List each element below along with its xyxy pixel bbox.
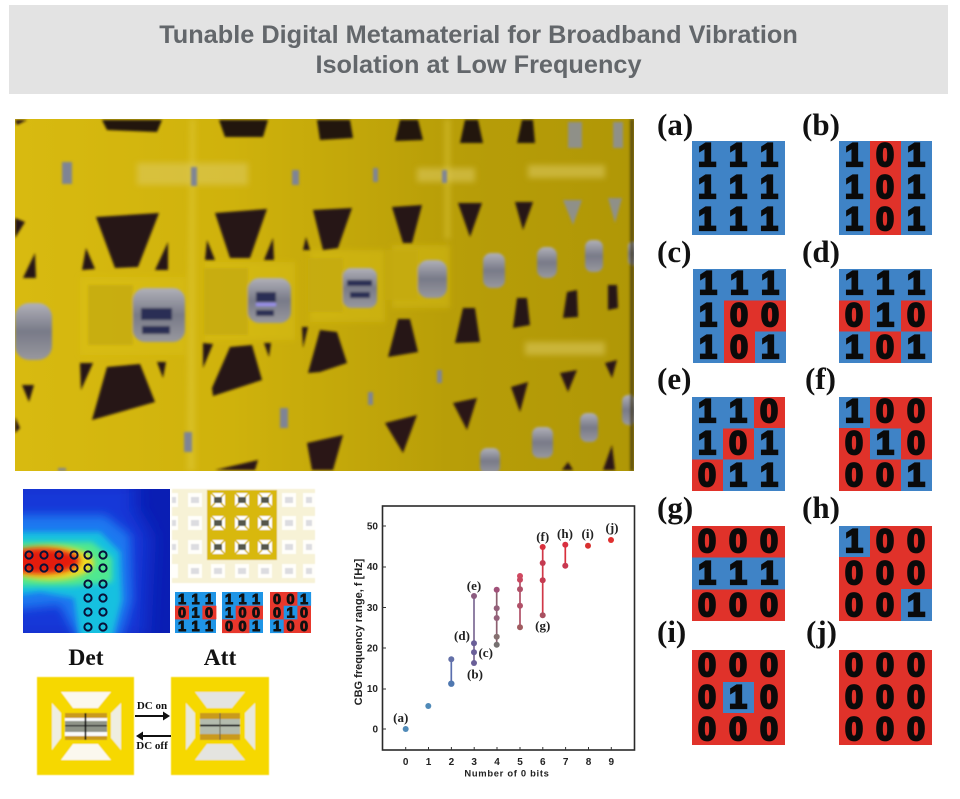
pattern (i): 010 [698,679,778,715]
pattern (a): 111 [698,201,778,237]
scatter chart: CBG frequency range vs number of 0 bits: (a) [393,710,408,725]
small coding pattern 2: 001 [225,619,260,635]
scatter chart: CBG frequency range vs number of 0 bits: Number of 0 bits [464,768,550,778]
scatter chart: CBG frequency range vs number of 0 bits: (h) [557,526,573,541]
pattern (a): 111 [698,169,778,205]
small coding pattern 2: 111 [225,592,260,608]
scatter chart: CBG frequency range vs number of 0 bits: 6 [540,757,546,768]
label (d): (d) [802,234,840,269]
small coding pattern 3: 001 [273,592,308,608]
pattern (e): 110 [698,393,778,429]
scatter chart: CBG frequency range vs number of 0 bits: (f) [536,529,549,544]
small coding pattern 3 [270,592,311,635]
scatter chart: CBG frequency range vs number of 0 bits: 10 [367,684,378,695]
pattern (d): 101 [845,329,925,365]
scatter chart: CBG frequency range vs number of 0 bits: (j) [606,520,618,535]
pattern (g) [692,523,785,623]
label (c): (c) [657,234,691,269]
label (g): (g) [657,490,693,525]
scatter chart: CBG frequency range vs number of 0 bits: 50 [367,522,378,532]
pattern (h): 000 [845,555,925,591]
pattern (b): 101 [845,137,925,173]
pattern (j) [839,647,932,747]
scatter chart: CBG frequency range vs number of 0 bits: 40 [367,562,378,573]
label (h): (h) [802,490,840,525]
scatter chart: CBG frequency range vs number of 0 bits: 2 [449,757,455,768]
scatter chart: CBG frequency range vs number of 0 bits: 5 [517,757,523,768]
scatter chart: CBG frequency range vs number of 0 bits: 20 [367,644,378,654]
pattern (f): 100 [845,393,925,429]
pattern (d) [839,265,932,365]
label (b): (b) [802,107,840,142]
scatter chart: CBG frequency range vs number of 0 bits: 7 [563,757,569,768]
pattern (j): 000 [845,647,925,683]
pattern (f) [839,393,932,493]
pattern (c): 100 [699,297,779,333]
title banner: Isolation at Low Frequency [315,51,642,79]
scatter chart: CBG frequency range vs number of 0 bits: 3 [471,757,477,768]
scatter chart: CBG frequency range vs number of 0 bits [353,506,634,778]
heatmap of vibration energy along waveguide [23,489,170,633]
pattern (g): 111 [698,555,778,591]
label (j): (j) [806,614,837,649]
pattern (e): 011 [698,457,778,493]
pattern (a): 111 [698,137,778,173]
photo: yellow metamaterial lattice with magnets [15,119,638,474]
arrow: DC off [136,732,171,740]
heading: Att: Att [204,645,236,671]
scatter chart: CBG frequency range vs number of 0 bits: 8 [586,757,592,768]
scatter chart: CBG frequency range vs number of 0 bits: 0 [403,757,409,768]
pattern (h) [839,523,932,623]
pattern (i): 000 [698,647,778,683]
label (a): (a) [657,107,693,142]
scatter chart: CBG frequency range vs number of 0 bits: 30 [367,603,378,614]
title banner: Tunable Digital Metamaterial for Broadband Vibration [159,21,798,49]
scatter chart: CBG frequency range vs number of 0 bits: CBG frequency range, f [Hz] [353,558,365,705]
unit cell: detached state [37,677,134,775]
pattern (i) [692,647,785,747]
arrow: DC on [135,712,170,720]
label (i): (i) [657,614,686,649]
pattern (b): 101 [845,201,925,237]
small coding pattern 2: 100 [225,606,260,622]
pattern (g): 000 [698,587,778,623]
scatter chart: CBG frequency range vs number of 0 bits: (c) [478,645,493,660]
pattern (j): 000 [845,679,925,715]
pattern (a) [692,137,785,237]
pattern (c): 101 [699,329,779,365]
pattern (e): 101 [698,425,778,461]
unit cell: attached state [171,677,269,775]
label (e): (e) [657,361,691,396]
pattern (f): 010 [845,425,925,461]
small coding pattern 1 [175,592,216,635]
small coding pattern 1: 010 [178,606,213,622]
scatter chart: CBG frequency range vs number of 0 bits: 0 [372,724,378,736]
pattern (d): 010 [845,297,925,333]
pattern (g): 000 [698,523,778,559]
pattern (h): 001 [845,587,925,623]
small coding pattern 2 [222,592,263,635]
scatter chart: CBG frequency range vs number of 0 bits: (b) [467,666,483,682]
scatter chart: CBG frequency range vs number of 0 bits: (g) [535,618,550,633]
pattern (c) [693,265,786,365]
scatter chart: CBG frequency range vs number of 0 bits: (e) [467,578,481,593]
pattern (c): 111 [699,265,779,301]
small coding pattern 1: 111 [178,592,213,608]
heading: Det: Det [68,645,104,671]
scatter chart: CBG frequency range vs number of 0 bits: 9 [609,757,615,768]
pattern (j): 000 [845,711,925,747]
pattern (i): 000 [698,711,778,747]
scatter chart: CBG frequency range vs number of 0 bits: (i) [582,526,594,541]
pattern (d): 111 [845,265,925,301]
scatter chart: CBG frequency range vs number of 0 bits: 4 [494,757,500,768]
pattern (e) [692,393,785,493]
small coding pattern 3: 100 [273,619,308,635]
scatter chart: CBG frequency range vs number of 0 bits: (d) [454,628,470,643]
unit cell array schematic [172,489,315,583]
small coding pattern 1: 111 [178,619,213,635]
pattern (b) [839,137,932,237]
small coding pattern 3: 010 [273,606,308,622]
pattern (f): 001 [845,457,925,493]
label: DC off: DC off [136,740,168,752]
pattern (h): 100 [845,523,925,559]
label (f): (f) [805,361,836,396]
pattern (b): 101 [845,169,925,205]
scatter chart: CBG frequency range vs number of 0 bits: 1 [426,757,432,768]
title banner [9,5,948,94]
label: DC on: DC on [137,700,167,712]
